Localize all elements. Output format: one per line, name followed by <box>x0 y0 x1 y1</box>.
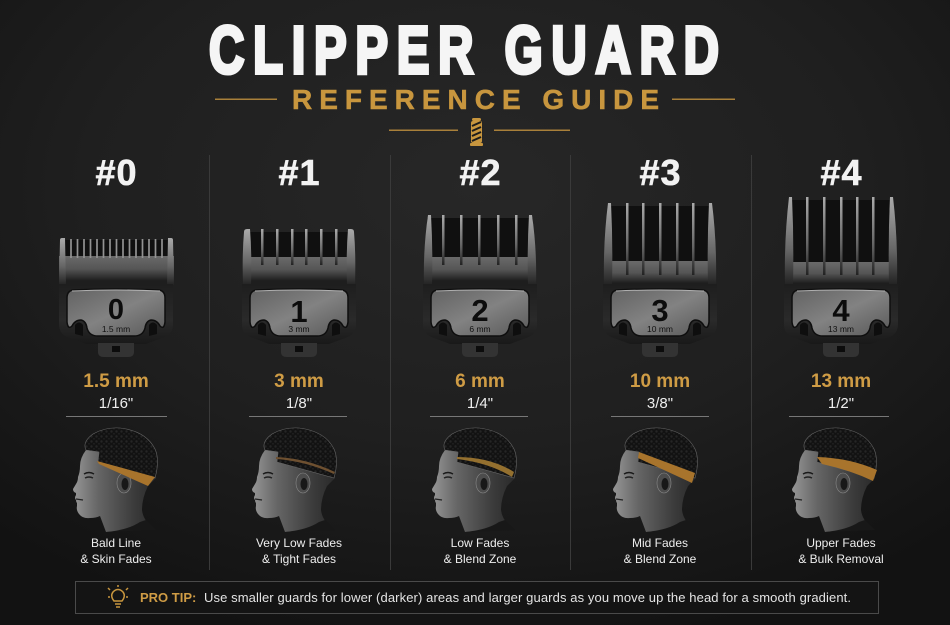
decorative rule lower right <box>494 130 570 131</box>
size in inches: 1/2" <box>828 395 854 412</box>
guard illustration 4 <box>784 197 898 357</box>
guard illustration 2 <box>423 215 537 357</box>
column: #0: & Skin Fades <box>80 552 152 566</box>
pro tip text: Use smaller guards for lower (darker) areas and larger guards as you move up the head for a smooth gradient. <box>204 590 851 605</box>
icon: light bulb <box>108 585 128 607</box>
column: #2 <box>423 152 537 566</box>
guard number: #2 <box>459 152 502 193</box>
icon: barber pole <box>470 118 483 146</box>
size in mm: 6 mm <box>455 371 505 392</box>
guard number: #3 <box>639 152 682 193</box>
size in mm: 1.5 mm <box>83 371 149 392</box>
column: #4: & Bulk Removal <box>798 552 884 566</box>
guard illustration 2: 2 <box>471 293 489 328</box>
panel: pro tip <box>76 582 878 614</box>
guard illustration 0: 0 <box>108 294 124 326</box>
usage label: Low Fades <box>451 536 509 550</box>
size in mm: 3 mm <box>274 371 324 392</box>
guard number: #4 <box>820 152 863 193</box>
guard illustration 0: 1.5 mm <box>102 324 130 334</box>
head illustration 4 <box>792 428 877 532</box>
guard illustration 3: 3 <box>651 293 669 328</box>
usage label: Mid Fades <box>632 536 688 550</box>
size in inches: 1/4" <box>467 395 493 412</box>
guard illustration 1: 1 <box>290 294 308 329</box>
column: #2: & Blend Zone <box>444 552 517 566</box>
guard number: #0 <box>95 152 138 193</box>
column: #0 <box>59 152 174 566</box>
guard illustration 3: 10 mm <box>647 324 673 334</box>
guard number: #1 <box>278 152 321 193</box>
guard illustration 1 <box>242 229 356 357</box>
guard illustration 4: 13 mm <box>828 324 854 334</box>
decorative rule left <box>215 98 277 100</box>
head illustration 1 <box>252 428 336 532</box>
head illustration 0 <box>73 428 158 532</box>
title: CLIPPER GUARD <box>209 14 728 88</box>
usage label: Very Low Fades <box>256 536 342 550</box>
size in inches: 1/8" <box>286 395 312 412</box>
decorative rule lower left <box>389 130 458 131</box>
guard illustration 0 <box>59 238 174 357</box>
head illustration 2 <box>432 428 516 532</box>
column: #3 <box>603 152 717 566</box>
guard illustration 4: 4 <box>832 293 850 328</box>
column: #3: & Blend Zone <box>624 552 697 566</box>
usage label: Upper Fades <box>806 536 876 550</box>
column: #1 <box>242 152 356 566</box>
usage label: Bald Line <box>91 536 141 550</box>
pro tip label: PRO TIP: <box>140 590 196 605</box>
guard illustration 3 <box>603 203 717 357</box>
column: #4 <box>784 152 898 566</box>
guard illustration 2: 6 mm <box>469 324 491 334</box>
size in mm: 10 mm <box>630 371 690 392</box>
decorative rule right <box>672 98 735 100</box>
guard illustration 1: 3 mm <box>288 324 310 334</box>
size in inches: 3/8" <box>647 395 673 412</box>
column: #1: & Tight Fades <box>262 552 336 566</box>
size in inches: 1/16" <box>99 395 133 412</box>
size in mm: 13 mm <box>811 371 871 392</box>
subtitle: reference guide: REFERENCE GUIDE <box>292 84 659 115</box>
head illustration 3 <box>613 428 698 532</box>
